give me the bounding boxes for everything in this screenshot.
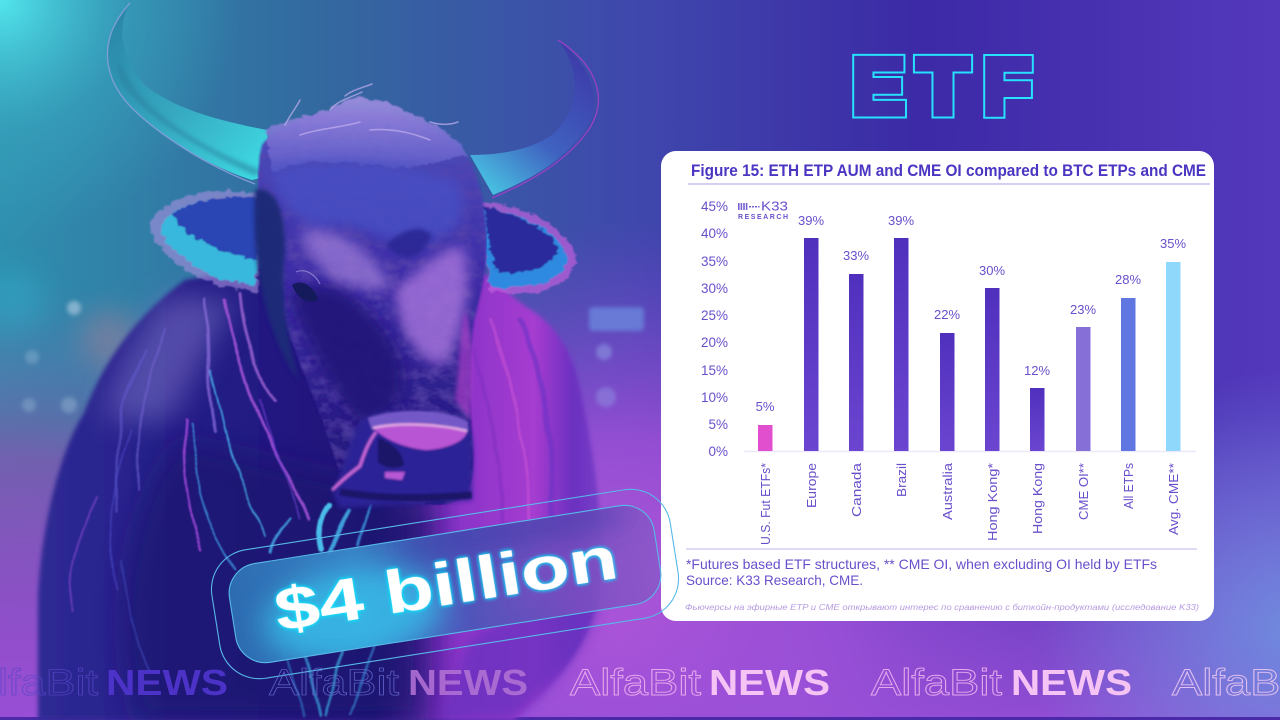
- y axis labels: 10%: [701, 390, 728, 405]
- watermark 3: AlfaBit: [570, 662, 702, 703]
- value labels: 39%: [798, 213, 824, 228]
- category labels: Hong Kong*: [985, 463, 1000, 541]
- left ear: [150, 191, 262, 292]
- category labels: Hong Kong: [1030, 463, 1045, 534]
- callout value: $4 billion: [270, 524, 622, 644]
- fur streaks: [71, 295, 553, 716]
- right ear: [478, 200, 576, 293]
- category labels: Australia: [940, 462, 955, 520]
- category labels: CME OI**: [1076, 463, 1091, 520]
- value labels: 5%: [756, 399, 775, 414]
- ETF heading: T: [918, 42, 968, 130]
- category labels: U.S. Fut ETFs*: [758, 463, 773, 545]
- logo: K33 Research: K33: [761, 198, 788, 214]
- watermark 1: NEWS: [106, 662, 228, 703]
- value labels: 28%: [1115, 272, 1141, 287]
- value labels: 23%: [1070, 302, 1096, 317]
- watermark 3: [570, 662, 830, 703]
- y axis labels: 15%: [701, 363, 728, 378]
- watermark 4: [871, 662, 1132, 703]
- category labels: [758, 462, 1181, 545]
- value labels: [756, 213, 1186, 414]
- caption: Фьючерсы на эфирные ETP и CME открывают интерес по сравнению с биткойн-продуктами (исследование K33): [685, 602, 1199, 612]
- value labels: 33%: [843, 248, 869, 263]
- watermark 2: AlfaBit: [269, 662, 400, 703]
- ETF heading: [852, 42, 1031, 130]
- logo: K33 Research: RESEARCH: [738, 214, 788, 221]
- bull head: [254, 84, 487, 508]
- value labels: 22%: [934, 307, 960, 322]
- callout: $4 billion pill: [206, 484, 684, 684]
- bar chart: [744, 238, 1196, 452]
- watermark 3: NEWS: [709, 662, 830, 703]
- value labels: 12%: [1024, 363, 1050, 378]
- category labels: All ETPs: [1121, 463, 1136, 509]
- y axis labels: 20%: [701, 335, 728, 350]
- background bokeh lights: [0, 270, 644, 413]
- category labels: Europe: [804, 463, 819, 508]
- y axis labels: 35%: [701, 254, 728, 269]
- y axis labels: 25%: [701, 308, 728, 323]
- left horn: [107, 3, 272, 184]
- footnote: Source: K33 Research, CME.: [686, 572, 863, 588]
- panel: chart card: [661, 151, 1214, 621]
- y axis labels: [701, 199, 728, 459]
- illustration: bull: [38, 3, 602, 720]
- y axis labels: 40%: [701, 226, 728, 241]
- y axis labels: 45%: [701, 199, 728, 214]
- forelock fur: [266, 98, 468, 172]
- watermark 2: [269, 662, 528, 703]
- watermark 2: NEWS: [408, 662, 528, 703]
- chart title: Figure 15: ETH ETP AUM and CME OI compared to BTC ETPs and CME: [691, 162, 1206, 180]
- watermark 5: AlfaBit: [1172, 662, 1280, 703]
- category labels: Canada: [849, 462, 864, 517]
- footnote: *Futures based ETF structures, ** CME OI, when excluding OI held by ETFs: [686, 556, 1157, 572]
- watermark row: [0, 662, 1280, 703]
- value labels: 35%: [1160, 236, 1186, 251]
- footnote: [686, 556, 1157, 588]
- ETF heading: F: [984, 42, 1031, 130]
- logo: K33 Research: [738, 198, 788, 221]
- value labels: 30%: [979, 263, 1005, 278]
- muzzle: [332, 411, 472, 508]
- y axis labels: 30%: [701, 281, 728, 296]
- watermark 4: AlfaBit: [871, 662, 1003, 703]
- value labels: 39%: [888, 213, 914, 228]
- category labels: Avg. CME**: [1166, 463, 1181, 535]
- watermark 4: NEWS: [1011, 662, 1132, 703]
- y axis labels: 5%: [708, 417, 728, 432]
- watermark 1: [0, 662, 228, 703]
- ETF heading: E: [852, 42, 905, 130]
- category labels: Brazil: [894, 463, 909, 497]
- right horn: [470, 40, 598, 198]
- y axis labels: 0%: [708, 444, 728, 459]
- bull body: [38, 260, 602, 720]
